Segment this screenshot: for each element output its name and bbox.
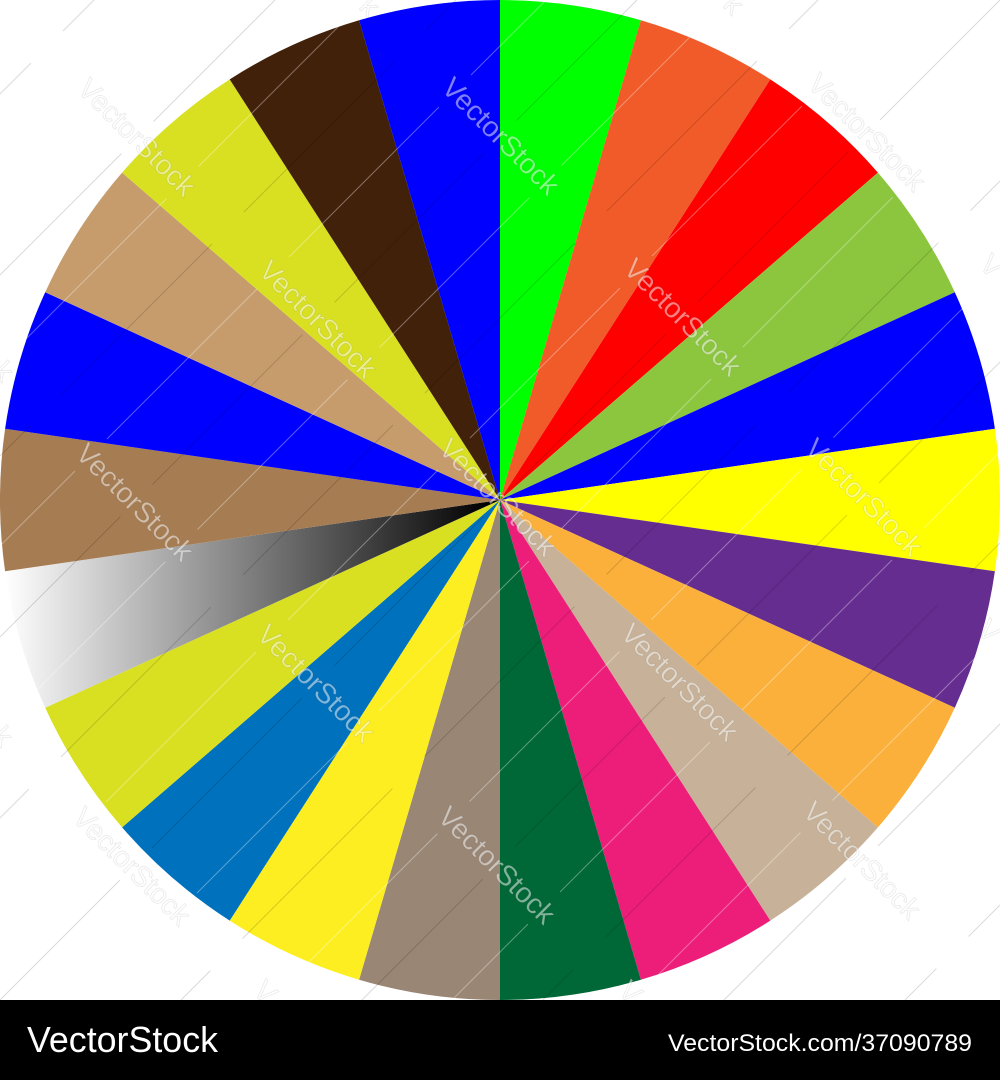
slice: blue top xyxy=(359,0,500,500)
slice: yellow green lower xyxy=(45,500,500,827)
slice: beige xyxy=(500,500,878,921)
footer bar xyxy=(0,1000,1000,1080)
watermark text grid: V xyxy=(247,974,283,1010)
slice: blue right xyxy=(500,292,995,500)
watermark text grid: VectorStock xyxy=(431,801,562,931)
slice: light green xyxy=(500,173,955,500)
watermark text grid: VectorStock xyxy=(250,619,381,749)
slice: dark brown xyxy=(230,20,500,500)
slice: brown xyxy=(0,429,500,571)
watermark text grid: VectorStock xyxy=(796,796,927,926)
slice: dark green xyxy=(500,500,641,1000)
watermark text grid: VectorStock xyxy=(798,433,929,563)
footer image URL: VectorStock.com/37090789 xyxy=(668,1030,972,1057)
slice: tan xyxy=(45,173,500,500)
watermark text grid: VectorStock xyxy=(435,72,566,202)
slice: black to white gradient xyxy=(5,500,500,708)
watermark text grid: V xyxy=(612,974,648,1010)
watermark text grid: VectorStock xyxy=(801,68,932,198)
watermark text grid: VectorStock xyxy=(66,802,197,932)
slice: bright yellow xyxy=(230,500,500,980)
slice: light orange xyxy=(500,500,955,827)
slice: orange xyxy=(500,20,770,500)
watermark text grid: VectorStock xyxy=(617,253,748,383)
watermark text grid: VectorStock xyxy=(69,438,200,568)
slice: grey brown xyxy=(359,500,500,1000)
watermark text grid: VectorStock xyxy=(432,433,563,563)
watermark text grid: VectorStock xyxy=(71,73,202,203)
slice: yellow xyxy=(500,429,1000,571)
slice: yellow green upper xyxy=(122,79,500,500)
slice: blue left xyxy=(5,292,500,500)
footer brand name: VectorStock xyxy=(27,1019,219,1060)
slice: purple xyxy=(500,500,995,708)
slice: mid blue xyxy=(122,500,500,921)
slice: red xyxy=(500,79,878,500)
slice: pink xyxy=(500,500,770,980)
watermark text grid: VectorStock xyxy=(614,618,745,748)
slice: green xyxy=(500,0,641,500)
watermark text grid: VectorStock xyxy=(252,255,383,385)
